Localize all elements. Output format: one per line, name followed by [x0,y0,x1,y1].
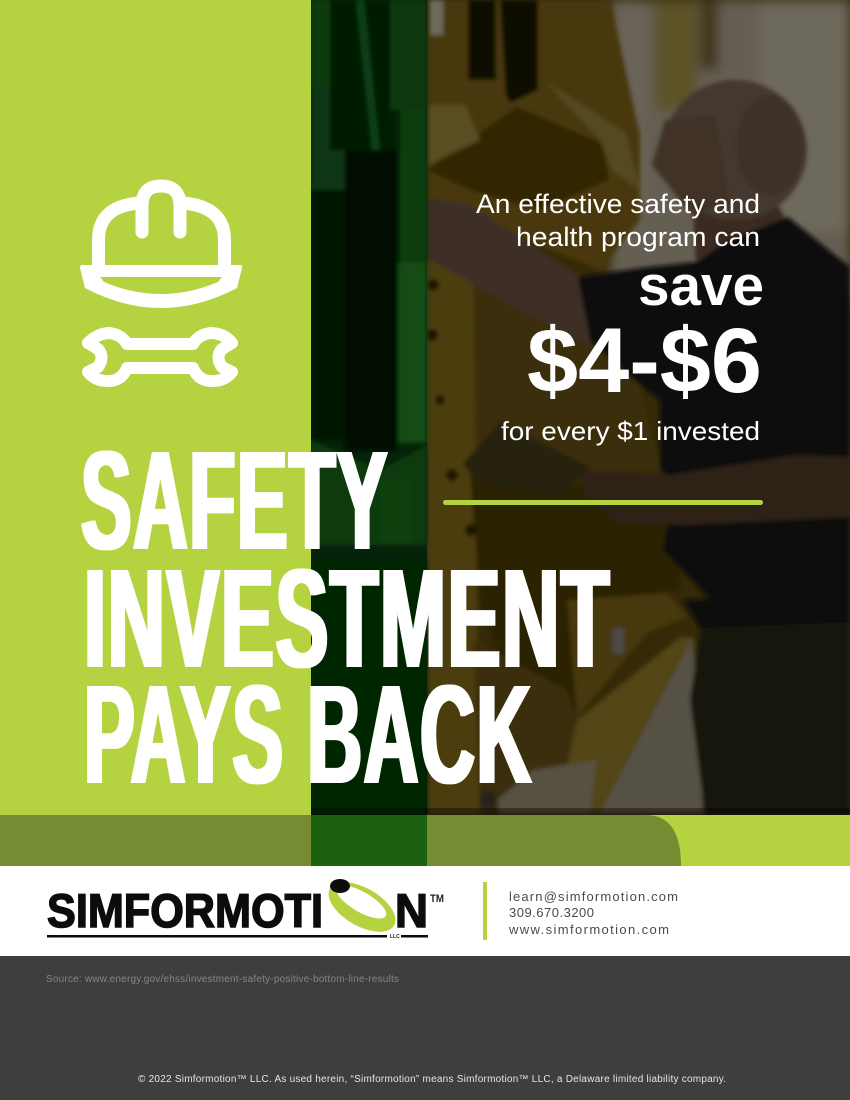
copyright note: © 2022 Simformotion™ LLC. As used herein, “Simformotion” means Simformotion™ LLC, a Delaware limited liability company. [138,1074,726,1085]
head [663,80,807,220]
callout: savings statistic: $4-$6 [527,310,762,412]
contact details: 309.670.3200 [509,905,594,920]
callout: savings statistic: An effective safety and [476,189,760,219]
callout: savings statistic: health program can [516,222,760,252]
logo: Simformotion [47,872,444,942]
logo: Simformotion: LLC [390,934,400,940]
callout: savings statistic [476,189,764,446]
shirt [578,217,850,610]
callout: savings statistic: for every $1 invested [501,416,760,446]
logo: Simformotion: TM [430,893,444,905]
title: Safety Investment Pays Back [81,421,611,813]
contact details: www.simformotion.com [508,922,669,937]
divider: vertical green bar [483,882,487,940]
arm [427,197,590,345]
contact details: learn@simformotion.com [509,889,678,904]
source note: Source: www.energy.gov/ehss/investment-safety-positive-bottom-line-results [46,974,399,985]
panel: white footer band [0,866,850,956]
divider: green rule under statistic [443,500,763,505]
clipboard [463,423,590,497]
panel: dark grey footer [0,956,850,1100]
panel: green left column [0,0,311,815]
icon: hard hat [80,186,242,308]
forearm [580,455,850,525]
dark green overlay band [311,0,427,815]
photo: worker with clipboard at yellow machinery, darkened [311,0,850,815]
bottom strip: olive and green bands [0,815,850,866]
title: Safety Investment Pays Back: SAFETY [81,421,389,579]
callout: savings statistic: save [638,254,764,318]
icon: wrench [88,333,232,381]
logo: Simformotion: SIMFORMOTI [47,884,323,937]
neck [691,204,790,263]
trousers [688,620,850,815]
logo: Simformotion: N [395,884,428,937]
contact details [508,889,678,937]
